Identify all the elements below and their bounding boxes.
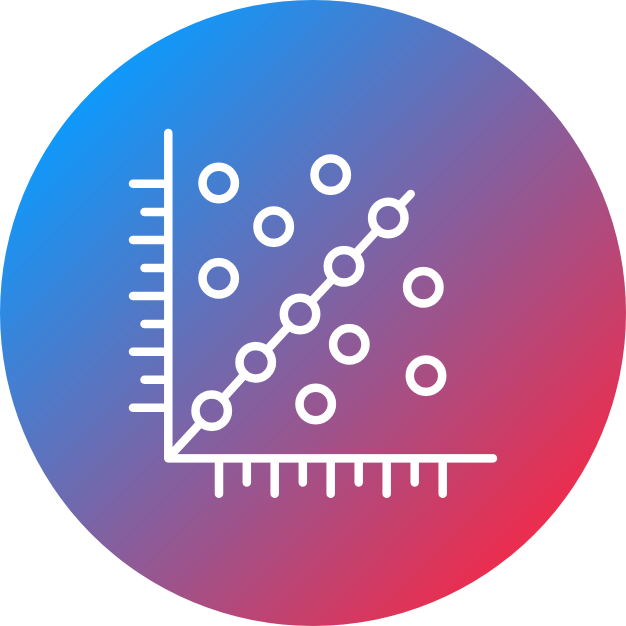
x axis ticks xyxy=(219,459,443,494)
scattered points above line xyxy=(202,158,347,294)
points on trend line xyxy=(196,202,404,427)
scattered points below line xyxy=(300,271,442,420)
icon: scatter plot xyxy=(133,133,493,494)
chart axes xyxy=(168,133,493,458)
trend line xyxy=(170,194,411,456)
y axis ticks xyxy=(133,184,168,408)
